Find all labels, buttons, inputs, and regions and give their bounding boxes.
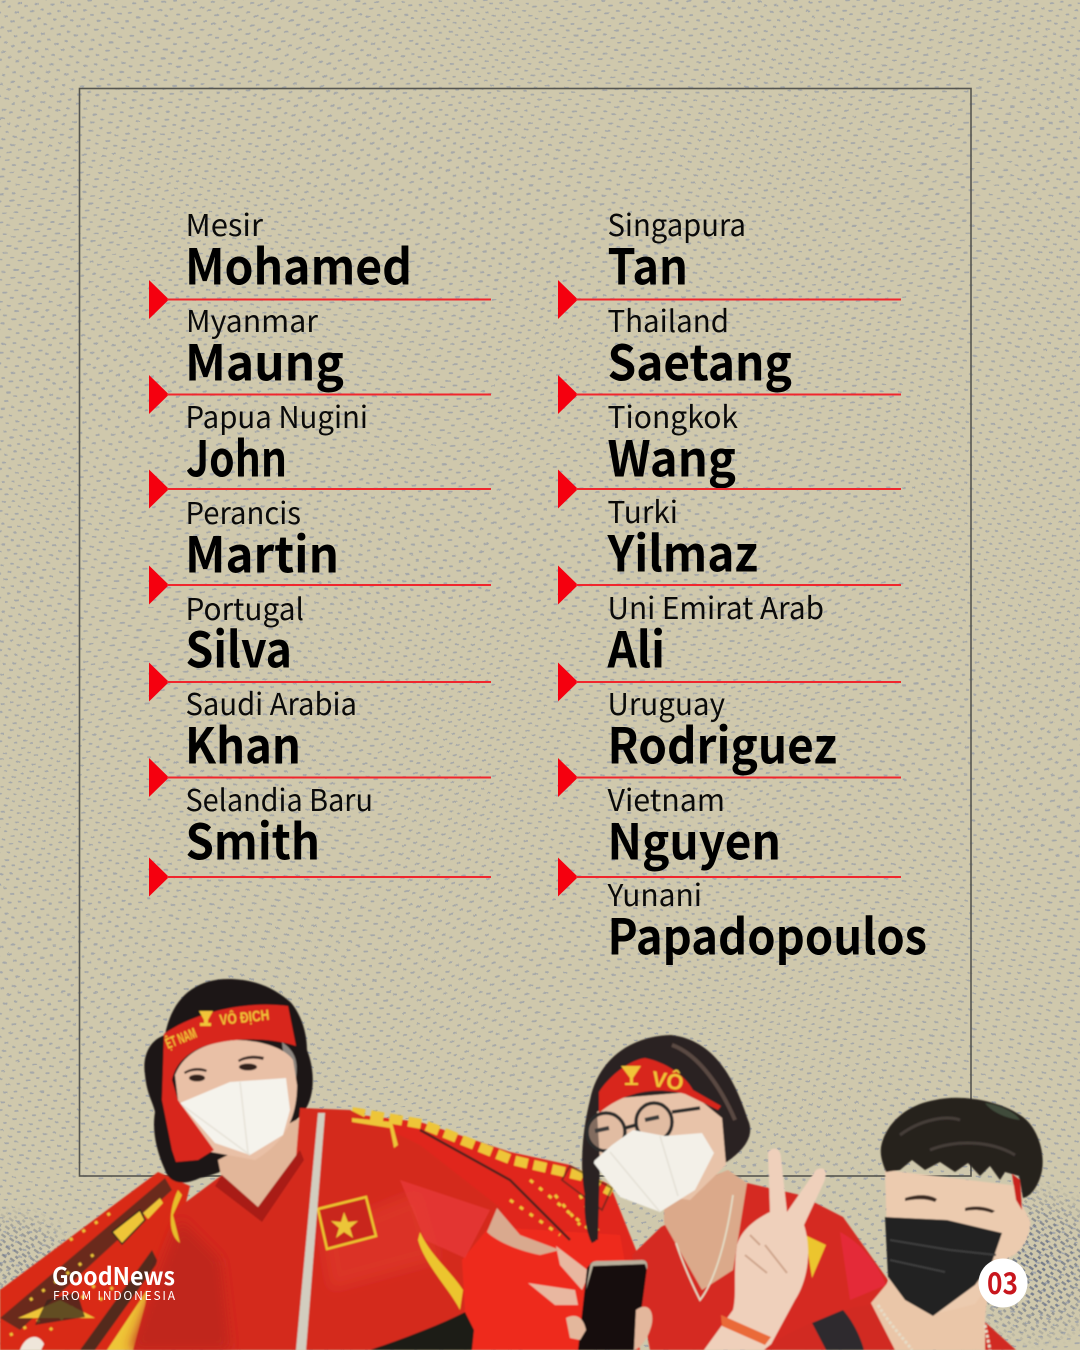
entry: Singapura Tan: Singapura [608,201,746,245]
phone and pointing hand [528,1246,652,1350]
entry: Papua Nugini John: John [186,420,287,491]
neck and chest [871,1260,992,1350]
peace hand [704,1149,826,1350]
entry: Tiongkok Wang [558,393,901,508]
eyes [905,1195,995,1213]
entry: Saudi Arabia Khan: Khan [185,707,301,778]
face [597,1092,726,1200]
entry: Vietnam Nguyen: Vietnam [608,776,725,820]
entry: Turki Yilmaz [558,488,901,604]
entry: Selandia Baru Smith: Smith [186,803,320,874]
entry: Turki Yilmaz: Turki [608,488,678,532]
face [175,1040,297,1160]
entry: Portugal Silva: Portugal [186,585,304,629]
neck [218,1118,300,1215]
entry: Singapura Tan [558,201,901,319]
hair [881,1098,1043,1198]
entry: Yunani Papadopoulos [607,871,927,969]
entry: Uruguay Rodriguez: Rodriguez [608,707,837,778]
entry: Saudi Arabia Khan: Saudi Arabia [186,680,357,724]
entry: Papua Nugini John: Papua Nugini [186,393,368,437]
entry: Tiongkok Wang: Tiongkok [608,393,738,437]
entry: Mesir Mohamed: Mesir [186,201,263,245]
headband: ỆT NAM [163,1024,199,1053]
back hair [144,979,313,1183]
headband [599,1058,721,1113]
page number badge [978,1258,1028,1308]
entry: Tiongkok Wang: Wang [608,420,736,491]
arm [487,1208,560,1255]
face [885,1170,1030,1315]
shirt [133,1108,503,1350]
entry: Perancis Martin [149,489,491,604]
glasses [587,1103,700,1151]
shirt trim: yellow [171,1118,463,1310]
gripping hand [566,1307,652,1350]
entry: Perancis Martin: Martin [185,516,339,587]
hair [582,1035,750,1240]
entry: Uni Emirat Arab Ali: Uni Emirat Arab [608,584,824,628]
person: woman with headband [130,979,560,1350]
person: woman with glasses [582,1035,888,1350]
photo: Vietnam supporters [0,979,1043,1350]
eyes [184,1056,264,1082]
face mask [593,1130,714,1212]
entry: Selandia Baru Smith: Selandia Baru [186,776,373,820]
entry: Uruguay Rodriguez [558,680,901,797]
person: man with black mask [764,1098,1043,1350]
entry: Mesir Mohamed: Mohamed [185,228,412,299]
hair strand [587,1160,594,1242]
entry: Yunani Papadopoulos: Papadopoulos [608,898,927,969]
logo: GoodNews from Indonesia: GoodNews [52,1257,175,1292]
headband [162,1005,296,1162]
right column list [558,201,927,969]
entry: Thailand Saetang [558,297,901,414]
left column list [149,201,491,896]
entry: Portugal Silva [149,585,491,702]
entry: Saudi Arabia Khan [149,680,491,797]
entry: Myanmar Maung [149,297,491,414]
entry: Vietnam Nguyen: Nguyen [608,803,781,874]
camera strap [296,1113,325,1350]
entry: Selandia Baru Smith [149,776,491,896]
entry: Thailand Saetang: Thailand [608,297,729,341]
entry: Vietnam Nguyen [558,776,901,896]
necklace [878,1305,990,1350]
entry: Mesir Mohamed [149,201,491,319]
logo: GoodNews from Indonesia: FROM INDONESIA [53,1287,176,1304]
frame border [80,88,971,1176]
flag patch [318,1197,376,1249]
backpack strap [812,1310,864,1350]
entry: Singapura Tan: Tan [608,228,688,299]
camera belt [370,1312,474,1350]
necklace [676,1195,733,1300]
entry: Thailand Saetang: Saetang [608,324,792,395]
entry: Perancis Martin: Perancis [186,489,301,533]
entry: Papua Nugini John [149,393,491,508]
face mask [180,1078,290,1155]
entry: Uruguay Rodriguez: Uruguay [608,680,725,724]
shirt [764,1300,1016,1350]
scarf: right wing [300,1108,640,1350]
shirt [632,1183,888,1350]
entry: Yunani Papadopoulos: Yunani [607,871,702,915]
black mask [885,1217,1002,1316]
entry: Myanmar Maung: Maung [185,324,344,395]
phone [578,1260,647,1350]
headband: VÔ ĐỊCH [219,1006,270,1029]
entry: Portugal Silva: Silva [186,611,292,682]
fingers [528,1246,590,1305]
page number badge: 03 [987,1259,1018,1303]
headband [1012,1174,1022,1210]
entry: Turki Yilmaz: Yilmaz [607,515,758,586]
neck [664,1170,747,1290]
scarf: left wing [0,1172,190,1350]
entry: Myanmar Maung: Myanmar [186,297,318,341]
entry: Uni Emirat Arab Ali [558,584,901,702]
headband: VÔ [650,1066,685,1095]
entry: Uni Emirat Arab Ali: Ali [607,611,665,682]
